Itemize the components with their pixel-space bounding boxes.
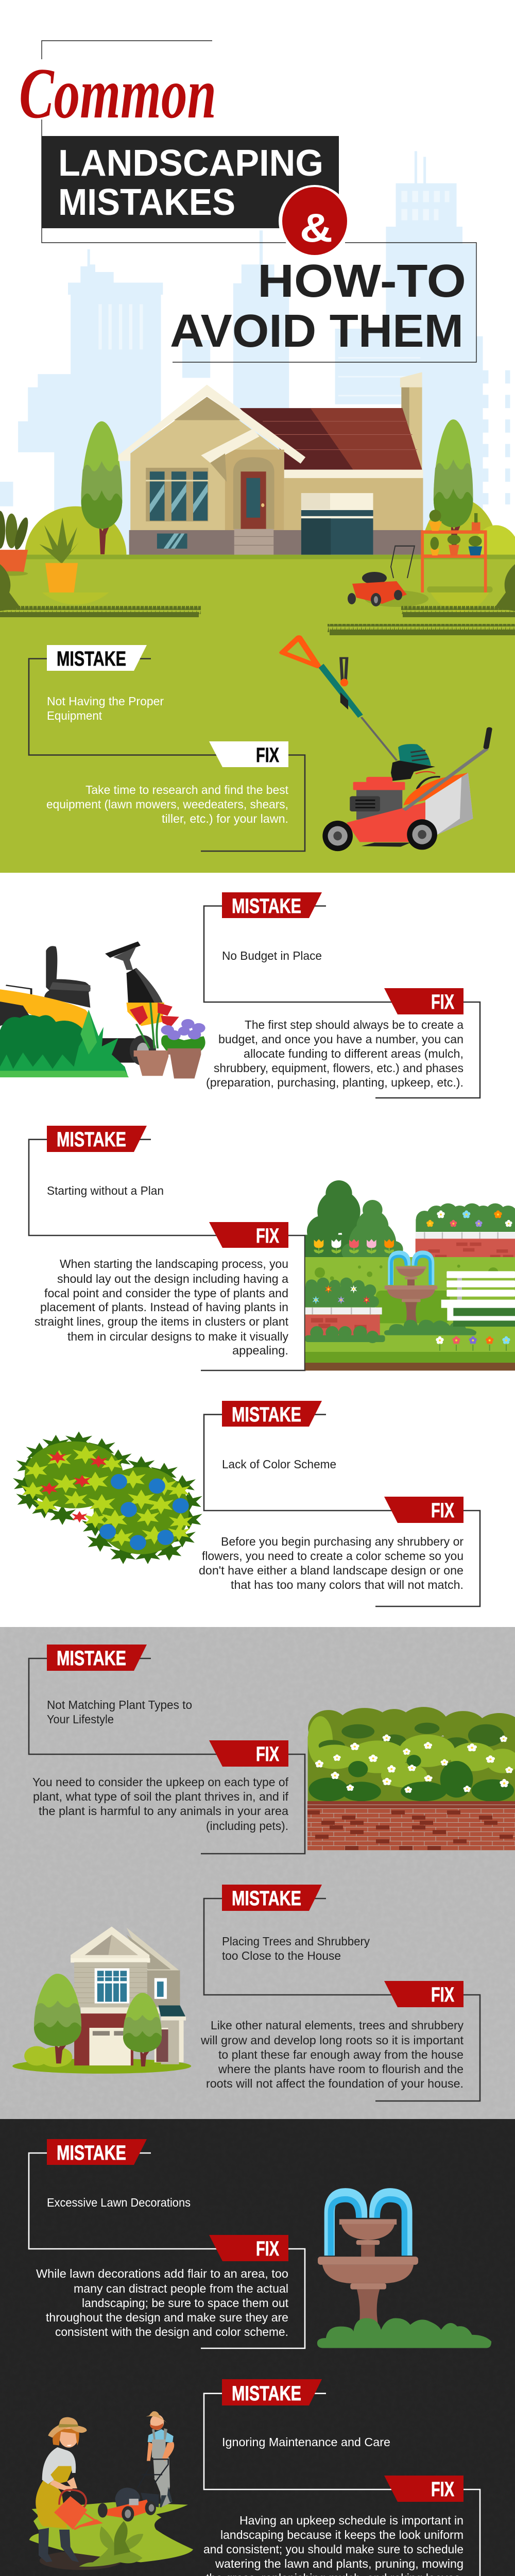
- title frame lines: [42, 41, 476, 362]
- fix text: landscaping because it keeps the look uniform: [220, 2528, 464, 2541]
- fix text: them in circular designs to make it visually: [67, 1330, 288, 1343]
- mistake text: Not Having the Proper: [47, 694, 164, 708]
- badge: fix: FIX: [431, 1499, 454, 1522]
- fix text: roots will not affect the foundation of your house.: [206, 2077, 464, 2090]
- fix text: While lawn decorations add flair to an area, too: [36, 2267, 288, 2280]
- badge: mistake: MISTAKE: [57, 648, 126, 670]
- fix text: [199, 1535, 464, 1591]
- fix text: don't have either a bland landscape design or one: [199, 1564, 464, 1577]
- fix text: shrubbery, equipment, flowers, etc.) and phases: [214, 1061, 464, 1075]
- illustration: fountain: [317, 2194, 491, 2348]
- title: how-to avoid them: [170, 256, 466, 357]
- mistake text: Lack of Color Scheme: [222, 1458, 336, 1471]
- badge: fix: [209, 1222, 288, 1248]
- badge: fix: [384, 988, 464, 1014]
- badge: fix: FIX: [256, 744, 279, 767]
- badge: fix: [209, 741, 288, 767]
- fix text: [35, 1257, 289, 1357]
- mistake text: Equipment: [47, 709, 102, 722]
- mistake text: [222, 1935, 370, 1962]
- badge: fix: FIX: [256, 2238, 279, 2260]
- badge: fix: [384, 1981, 464, 2007]
- badge: fix: FIX: [431, 1984, 454, 2006]
- fix text: [36, 2267, 289, 2338]
- badge: fix: FIX: [431, 991, 454, 1013]
- badge: mistake: MISTAKE: [57, 1647, 126, 1670]
- panel: mistake 5: [29, 1645, 305, 1854]
- badge: fix: [384, 1497, 464, 1523]
- panel: mistake 8: [203, 2379, 480, 2576]
- green ground panel: [0, 555, 515, 873]
- badge: mistake: MISTAKE: [232, 1887, 301, 1910]
- fix text: and consistent; you should make sure to schedule: [203, 2543, 464, 2556]
- mistake text: Excessive Lawn Decorations: [47, 2196, 191, 2209]
- fix text: [32, 1775, 289, 1833]
- title: how-to avoid them: HOW-TO: [258, 256, 466, 307]
- mistake text: too Close to the House: [222, 1949, 341, 1962]
- panel: mistake 4: [199, 1401, 480, 1606]
- title block: landscaping mistakes: LANDSCAPING: [58, 143, 323, 184]
- illustration: flowering shrub: [13, 1432, 202, 1564]
- illustration: hedge on brick wall: [307, 1707, 515, 1851]
- fix text: landscaping; be sure to space them out: [82, 2296, 289, 2310]
- badge: mistake: MISTAKE: [57, 2142, 126, 2164]
- illustration: riding mower and flower pots: [0, 941, 205, 1078]
- badge: mistake: MISTAKE: [232, 895, 301, 918]
- mistake text: [47, 694, 164, 722]
- badge: fix: [209, 2235, 288, 2261]
- fix text: straight lines, group the items in clusters or plant: [35, 1315, 289, 1328]
- fix text: [206, 1018, 464, 1089]
- fix text: where the plants have room to flourish and the: [218, 2062, 464, 2076]
- mistake text: Placing Trees and Shrubbery: [222, 1935, 370, 1948]
- panel: hero scene: [0, 0, 515, 555]
- mistake text: Not Matching Plant Types to: [47, 1698, 192, 1711]
- badge: fix: FIX: [256, 1225, 279, 1247]
- illustration: trimmer and lawn mower: [283, 637, 489, 851]
- illustration: grass strips and corner leaves: [0, 564, 515, 635]
- fix text: allocate funding to different areas (mulch,: [244, 1047, 464, 1060]
- illustration: hero house and garden: [0, 372, 515, 612]
- skyline background: [0, 151, 510, 555]
- fix text: will grow and develop long roots so it is important: [200, 2033, 464, 2047]
- fix text: flowers, you need to create a color scheme so you: [202, 1549, 464, 1563]
- badge: fix: FIX: [431, 2478, 454, 2501]
- title: how-to avoid them: AVOID THEM: [170, 306, 464, 357]
- fix text: The first step should always be to create a: [245, 1018, 464, 1031]
- illustration: small red mower: [348, 572, 428, 607]
- badge: mistake: MISTAKE: [57, 1128, 126, 1151]
- fix text: placement of plants. Instead of having plants in: [40, 1300, 288, 1314]
- badge: fix: [209, 1740, 288, 1767]
- illustration: garden with fountain and bench: [305, 1180, 515, 1370]
- title: Common: Common: [19, 54, 216, 133]
- fix text: appealing.: [232, 1344, 288, 1357]
- fix text: consistent with the design and color scheme.: [55, 2325, 288, 2338]
- title block: landscaping mistakes: MISTAKES: [58, 182, 235, 223]
- mistake text: Your Lifestyle: [47, 1713, 114, 1726]
- fix text: throughout the design and make sure they are: [46, 2311, 288, 2324]
- badge: fix: FIX: [256, 1743, 279, 1766]
- fix text: that has too many colors that will not match.: [231, 1578, 464, 1591]
- dark panel background: [0, 2119, 515, 2576]
- fix text: should lay out the design including having a: [57, 1272, 288, 1285]
- fix text: [203, 2514, 464, 2576]
- fix text: (including pets).: [206, 1819, 288, 1833]
- illustration: two-storey house with trees: [12, 1926, 191, 2074]
- badge: mistake: MISTAKE: [232, 2382, 301, 2405]
- badge: fix: [384, 2476, 464, 2502]
- fix text: the plant is harmful to any animals in your area: [39, 1804, 288, 1818]
- fix text: (preparation, purchasing, planting, upkeep, etc.).: [206, 1076, 464, 1089]
- ampersand badge: &: [300, 205, 333, 250]
- fix text: plant, what type of soil the plant thrives in, and if: [33, 1790, 289, 1803]
- fix text: tiller, etc.) for your lawn.: [162, 812, 288, 825]
- fix text: Take time to research and find the best: [85, 783, 289, 796]
- panel: mistake 7: [29, 2139, 305, 2348]
- fix text: focal point and consider the type of plants and: [44, 1286, 288, 1300]
- panel: mistake 6: [200, 1885, 480, 2101]
- illustration: gardeners with mower and watering can: [29, 2411, 193, 2570]
- fix text: When starting the landscaping process, you: [60, 1257, 288, 1270]
- mistake text: [47, 1698, 192, 1726]
- fix text: equipment (lawn mowers, weedeaters, shears,: [46, 798, 288, 811]
- fix text: [200, 2019, 464, 2090]
- fix text: Before you begin purchasing any shrubbery or: [221, 1535, 464, 1548]
- fix text: budget, and once you have a number, you can: [218, 1032, 464, 1046]
- grey panel background: [0, 1627, 515, 2119]
- mistake text: Starting without a Plan: [47, 1184, 164, 1197]
- fix text: to plant these far enough away from the house: [218, 2048, 464, 2061]
- mistake text: Ignoring Maintenance and Care: [222, 2435, 390, 2449]
- panel: mistake 1: [29, 645, 305, 851]
- title block: landscaping mistakes: [42, 136, 339, 228]
- fix text: watering the lawn and plants, pruning, mowing: [215, 2557, 464, 2570]
- ampersand badge: [279, 185, 351, 257]
- fix text: [46, 783, 289, 825]
- fix text: many can distract people from the actual: [74, 2282, 288, 2295]
- fix text: Having an upkeep schedule is important in: [239, 2514, 464, 2527]
- panel: mistake 2: [204, 892, 480, 1098]
- fix text: Like other natural elements, trees and shrubbery: [211, 2019, 464, 2032]
- mistake text: No Budget in Place: [222, 949, 322, 962]
- badge: mistake: MISTAKE: [232, 1403, 301, 1426]
- panel: mistake 3: [29, 1126, 305, 1370]
- fix text: You need to consider the upkeep on each type of: [32, 1775, 289, 1789]
